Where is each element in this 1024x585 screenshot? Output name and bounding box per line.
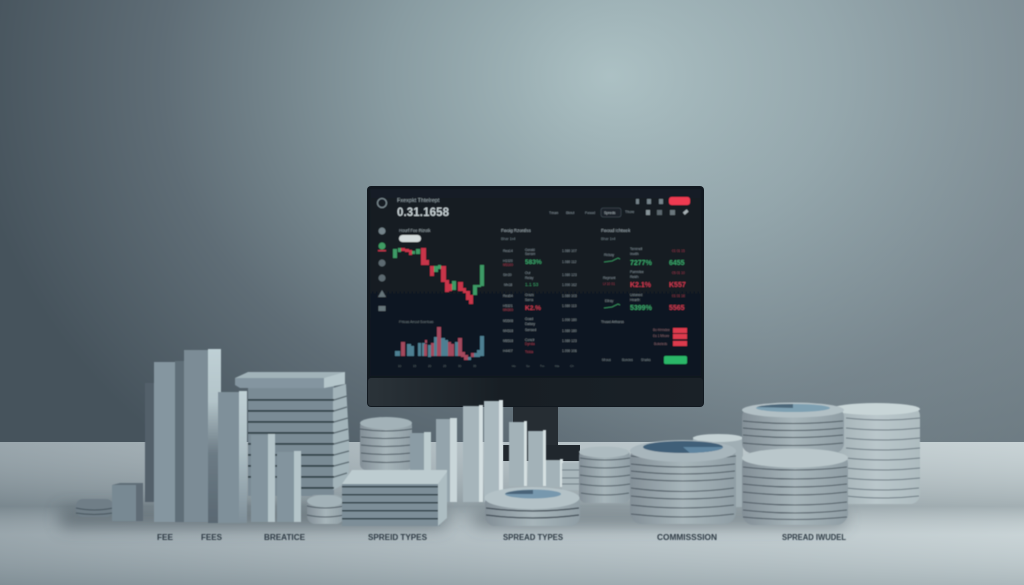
panel: pricing table: Fwoig Rzontlss <box>501 228 532 233</box>
panel: pricing table: M8518 <box>503 339 513 343</box>
monitor frame <box>367 186 704 407</box>
block: tall 1 <box>154 361 184 522</box>
disc behind <box>562 463 579 490</box>
x axis ticks: 15 <box>413 364 417 368</box>
floor shadows <box>60 508 845 528</box>
footer buttons: Shalks <box>641 358 651 362</box>
label: spread model: SPREAD IWUDEL <box>782 533 846 542</box>
x axis ticks: 25 <box>443 364 447 368</box>
panel: pricing table: So <box>526 364 530 368</box>
panel: pricing table: Sensm <box>525 252 536 256</box>
header: tabs and buttons <box>549 197 690 217</box>
x axis ticks: 10 <box>398 364 402 368</box>
bar and disc blocks: spread group <box>463 400 920 526</box>
block <box>484 400 503 502</box>
sidebar icons <box>378 228 386 311</box>
panel: candlestick chart <box>393 228 484 368</box>
footer buttons: Mrous <box>602 358 611 362</box>
panel: pricing table: Dynda <box>525 342 535 346</box>
panel: fund list: 7277% <box>630 260 653 267</box>
panel: pricing table: Ho <box>512 364 516 368</box>
panel: pricing table: Tm <box>540 364 545 368</box>
panel: fund list: Inwtlh <box>630 252 639 256</box>
small disc <box>307 495 344 524</box>
red action buttons: Bo Hmndee <box>653 328 670 332</box>
panel: fund list: Thowd Artharss <box>601 320 624 324</box>
candles <box>393 248 484 304</box>
panel: pricing table: M3508 <box>503 319 513 323</box>
block <box>463 405 483 502</box>
block: behind stack <box>410 432 431 471</box>
caption labels <box>157 533 846 542</box>
block: front mid <box>218 391 247 523</box>
panel: pricing table: Tidda <box>525 350 533 354</box>
panel: pricing table: Gerald <box>525 248 535 252</box>
block: short trio <box>509 421 563 487</box>
panel: pricing table: H4407 <box>503 349 513 353</box>
panel: pricing table: Goad <box>525 317 533 321</box>
panel: pricing table: 583% <box>525 259 542 266</box>
panel: pricing table: Serra <box>525 298 533 302</box>
panel: fund list: K557 <box>669 282 686 289</box>
disc stack: upper right with pie <box>742 402 844 453</box>
header: tabs and buttons: Fvood <box>585 211 595 215</box>
panel: pricing table: 1.080 113 <box>562 304 577 308</box>
header: tabs and buttons: Spreds <box>604 211 616 215</box>
panel: pricing table: M3100 <box>503 263 513 267</box>
panel: pricing table: M4518 <box>503 329 513 333</box>
panel: pricing table: Rea54 <box>503 294 513 298</box>
x axis ticks: 20 <box>428 364 432 368</box>
panel: pricing table: 1.080 180 <box>562 329 577 333</box>
panel: pricing table: K2.% <box>525 305 541 312</box>
panel: fund list: Lf 10 01 <box>603 282 615 286</box>
label: fees: FEES <box>201 533 223 542</box>
panel: pricing table: Bhar 1x4 <box>501 237 515 241</box>
panel: fund list: Repriunt <box>603 276 616 280</box>
panel: pricing table: Stn30 <box>503 273 512 277</box>
panel: pricing table: M4300 <box>503 308 513 312</box>
panel: fund list: 05 01 10 <box>672 271 685 275</box>
footer buttons <box>602 356 687 364</box>
panel: pricing table: Ma <box>555 364 559 368</box>
panel: pricing table <box>501 228 577 368</box>
panel: pricing table: 1.090 162 <box>562 283 577 287</box>
panel: fund list: Bhar 1x4 <box>601 237 615 241</box>
panel: pricing table: 1.090 106 <box>562 349 577 353</box>
panel: pricing table: 1.090 180 <box>562 318 577 322</box>
block: stack of slabs <box>235 372 349 496</box>
x axis ticks <box>398 364 477 368</box>
panel: fund list: Fwoud Ichtwek <box>601 228 631 233</box>
volume bars: Fhtoas Arrcut Soerloas <box>399 320 434 324</box>
monitor stand <box>503 405 580 461</box>
red action buttons: Es 1 Mhore <box>653 334 670 338</box>
disc stack: mid <box>579 446 630 503</box>
panel: fund list: Reklh <box>630 275 639 279</box>
panel: fund list <box>601 228 687 364</box>
header: tabs and buttons: Tman <box>549 211 558 215</box>
block: front short 2 <box>277 451 301 522</box>
panel: fund list: Pumnilee <box>630 270 644 274</box>
disc stack: far right <box>832 403 920 504</box>
panel: pricing table: Rea14 <box>503 249 513 253</box>
block: tall back <box>145 383 155 502</box>
monitor <box>367 186 704 461</box>
small disc <box>76 499 113 517</box>
label: breatice: BREATICE <box>264 533 306 542</box>
panel: pricing table: H1020 <box>503 259 513 263</box>
bar blocks: fees group <box>76 349 457 526</box>
header: logo and price: Fxexpkt Thtelrept <box>397 198 440 204</box>
table surface <box>0 442 1024 585</box>
x axis ticks: 35 <box>473 364 477 368</box>
header: tabs and buttons: Bkrut <box>566 211 574 215</box>
panel: pricing table: 1.1 53 <box>525 282 539 288</box>
disc stack: pie small <box>484 487 580 526</box>
label: spread types 2: SPREAD TYPES <box>503 533 564 542</box>
panel: pricing table: Grazs <box>525 293 534 297</box>
panel: fund list: 01 01 18 <box>672 294 685 298</box>
block: front short 1 <box>251 434 275 522</box>
block: tall right <box>436 418 457 502</box>
panel: pricing table: H5321 <box>503 304 513 308</box>
panel: pricing table: Dalsey <box>525 322 535 326</box>
panel: pricing table: Sensed <box>525 328 536 332</box>
panel: fund list: Ridsay <box>604 253 614 257</box>
panel: fund list: 6455 <box>669 260 685 267</box>
panel: fund list: 5399% <box>630 305 653 312</box>
disc: top only behind <box>693 434 743 507</box>
block: tallest <box>184 349 221 523</box>
panel: pricing table: 1.080 107 <box>562 249 577 253</box>
panel: pricing table: 1.080 103 <box>562 294 577 298</box>
header: logo and price: 0.31.1658 <box>397 207 450 219</box>
small block <box>112 483 143 521</box>
disc stack: lower right <box>742 448 848 525</box>
panel: fund list: Hnarth <box>630 298 640 302</box>
panel: pricing table: Relay <box>525 276 534 280</box>
red action buttons: Bukeleds <box>654 342 668 346</box>
panel: pricing table: Mn18 <box>504 283 512 287</box>
panel: fund list: Eliray <box>605 299 614 303</box>
panel: pricing table: 1.080 112 <box>562 260 577 264</box>
label: spread types 1: SPREID TYPES <box>368 533 428 542</box>
header: logo and price <box>378 198 450 219</box>
panel: pricing table: Our <box>525 271 531 275</box>
panel: pricing table: 1.080 123 <box>562 339 577 343</box>
panel: fund list: K2.1% <box>630 282 652 289</box>
panel: pricing table: 1.080 123 <box>562 273 577 277</box>
dashboard screen <box>370 189 701 376</box>
slab stack: front <box>342 470 447 526</box>
disc stack: back <box>360 417 412 470</box>
label: commission: COMMISSSION <box>657 533 717 542</box>
red action buttons <box>653 328 687 346</box>
wall background <box>0 0 1024 443</box>
x axis ticks: 30 <box>458 364 462 368</box>
panel: fund list: Ustaned <box>630 293 642 297</box>
label: fee: FEE <box>157 533 174 542</box>
panel: fund list: 01 01 15 <box>672 249 685 253</box>
header: tabs and buttons: Thore <box>625 210 634 214</box>
panel: fund list: Tennnell <box>630 247 643 251</box>
panel: pricing table: Ch <box>570 364 574 368</box>
footer buttons: Bondes <box>622 358 633 362</box>
panel: pricing table: Conclr <box>525 338 535 342</box>
panel: candlestick chart: Hourf Fee Rizotk <box>399 228 431 233</box>
disc stack: commission <box>630 440 736 524</box>
panel: fund list: 5565 <box>669 305 685 312</box>
